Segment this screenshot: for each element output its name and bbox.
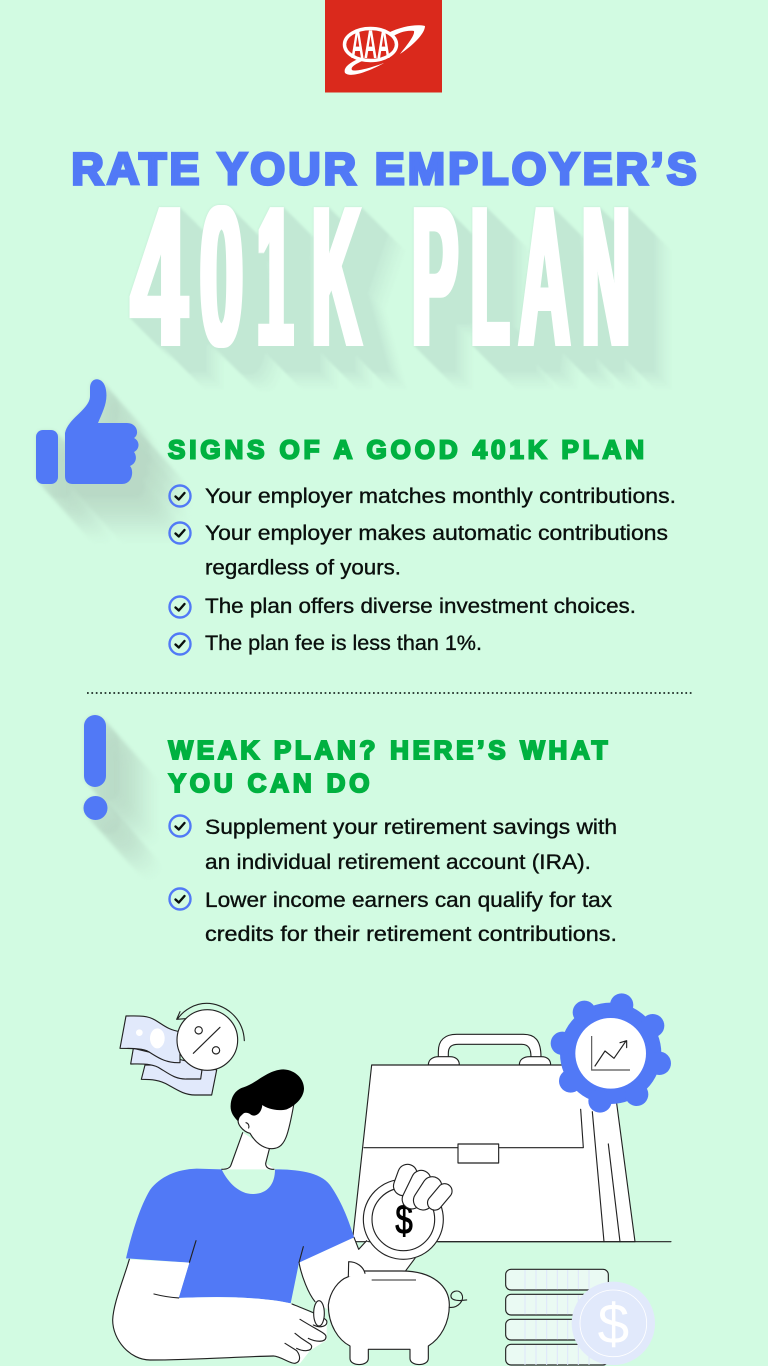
AAA logo: AAA bbox=[351, 23, 390, 67]
illustration: person saving with piggy bank bbox=[113, 993, 671, 1365]
item 3 text: The plan offers diverse investment choices. bbox=[205, 595, 636, 618]
right arm bbox=[299, 1237, 415, 1327]
item 2 text: regardless of yours. bbox=[205, 556, 401, 580]
title: 401K PLAN with long shadow bbox=[131, 166, 630, 388]
shirt bbox=[126, 1169, 354, 1303]
forearm bbox=[113, 1259, 327, 1363]
title: 401K PLAN with long shadow: 1 bbox=[257, 166, 293, 388]
heading: weak plan bbox=[168, 735, 608, 798]
list: what you can do bbox=[170, 816, 617, 946]
action 2 text bbox=[205, 889, 617, 946]
percent coin bbox=[177, 1003, 244, 1070]
title line: Rate your employer's: RATE YOUR EMPLOYER’S bbox=[72, 145, 696, 194]
action 1 text: Supplement your retirement savings with bbox=[205, 816, 617, 839]
list: good plan signs bbox=[170, 485, 676, 655]
piggy bank bbox=[314, 1262, 467, 1365]
person bbox=[113, 1069, 415, 1363]
heading: weak plan: YOU CAN DO bbox=[168, 768, 370, 798]
icon: exclamation mark bbox=[84, 715, 108, 820]
action 1 text: an individual retirement account (IRA). bbox=[205, 851, 591, 874]
item 2 text bbox=[205, 522, 668, 580]
briefcase bbox=[352, 1034, 671, 1242]
title: 401K PLAN with long shadow: L bbox=[471, 166, 509, 388]
icon: thumbs up bbox=[36, 379, 138, 484]
title: 401K PLAN with long shadow: 4 bbox=[131, 166, 187, 388]
coin stack bbox=[506, 1269, 608, 1365]
face bbox=[238, 1100, 294, 1149]
title: 401K PLAN with long shadow: 0 bbox=[200, 166, 243, 388]
heading: signs of a good plan: SIGNS OF A GOOD 401K PLAN bbox=[168, 434, 644, 464]
title: 401K PLAN with long shadow: K bbox=[312, 166, 361, 388]
AAA logo bbox=[325, 0, 442, 92]
action 1 text bbox=[205, 816, 617, 874]
action 1 check bbox=[170, 816, 190, 836]
action 2 check bbox=[170, 888, 190, 910]
item 1 check bbox=[170, 486, 190, 506]
action 2 text: Lower income earners can qualify for tax bbox=[205, 889, 613, 912]
action 2 text: credits for their retirement contributions. bbox=[205, 923, 617, 946]
item 4 text: The plan fee is less than 1%. bbox=[205, 632, 482, 655]
coin in hand: $ bbox=[395, 1195, 413, 1242]
bills bbox=[120, 1016, 217, 1095]
text: N bbox=[582, 166, 630, 388]
item 3 check bbox=[170, 596, 190, 618]
dollar coin bbox=[572, 1282, 655, 1365]
coin in hand bbox=[363, 1162, 455, 1259]
title: 401K PLAN with long shadow: A bbox=[519, 166, 570, 388]
item 2 check bbox=[170, 522, 190, 544]
item 2 text: Your employer makes automatic contributions bbox=[205, 522, 668, 545]
hair bbox=[231, 1069, 304, 1122]
title: 401K PLAN with long shadow: P bbox=[412, 166, 458, 388]
gear with growth chart bbox=[551, 993, 671, 1113]
item 4 check bbox=[170, 634, 190, 654]
item 1 text: Your employer matches monthly contributions. bbox=[205, 485, 676, 508]
neck bbox=[222, 1133, 275, 1169]
heading: weak plan: WEAK PLAN? HERE’S WHAT bbox=[168, 735, 608, 765]
dollar coin: $ bbox=[598, 1293, 629, 1356]
